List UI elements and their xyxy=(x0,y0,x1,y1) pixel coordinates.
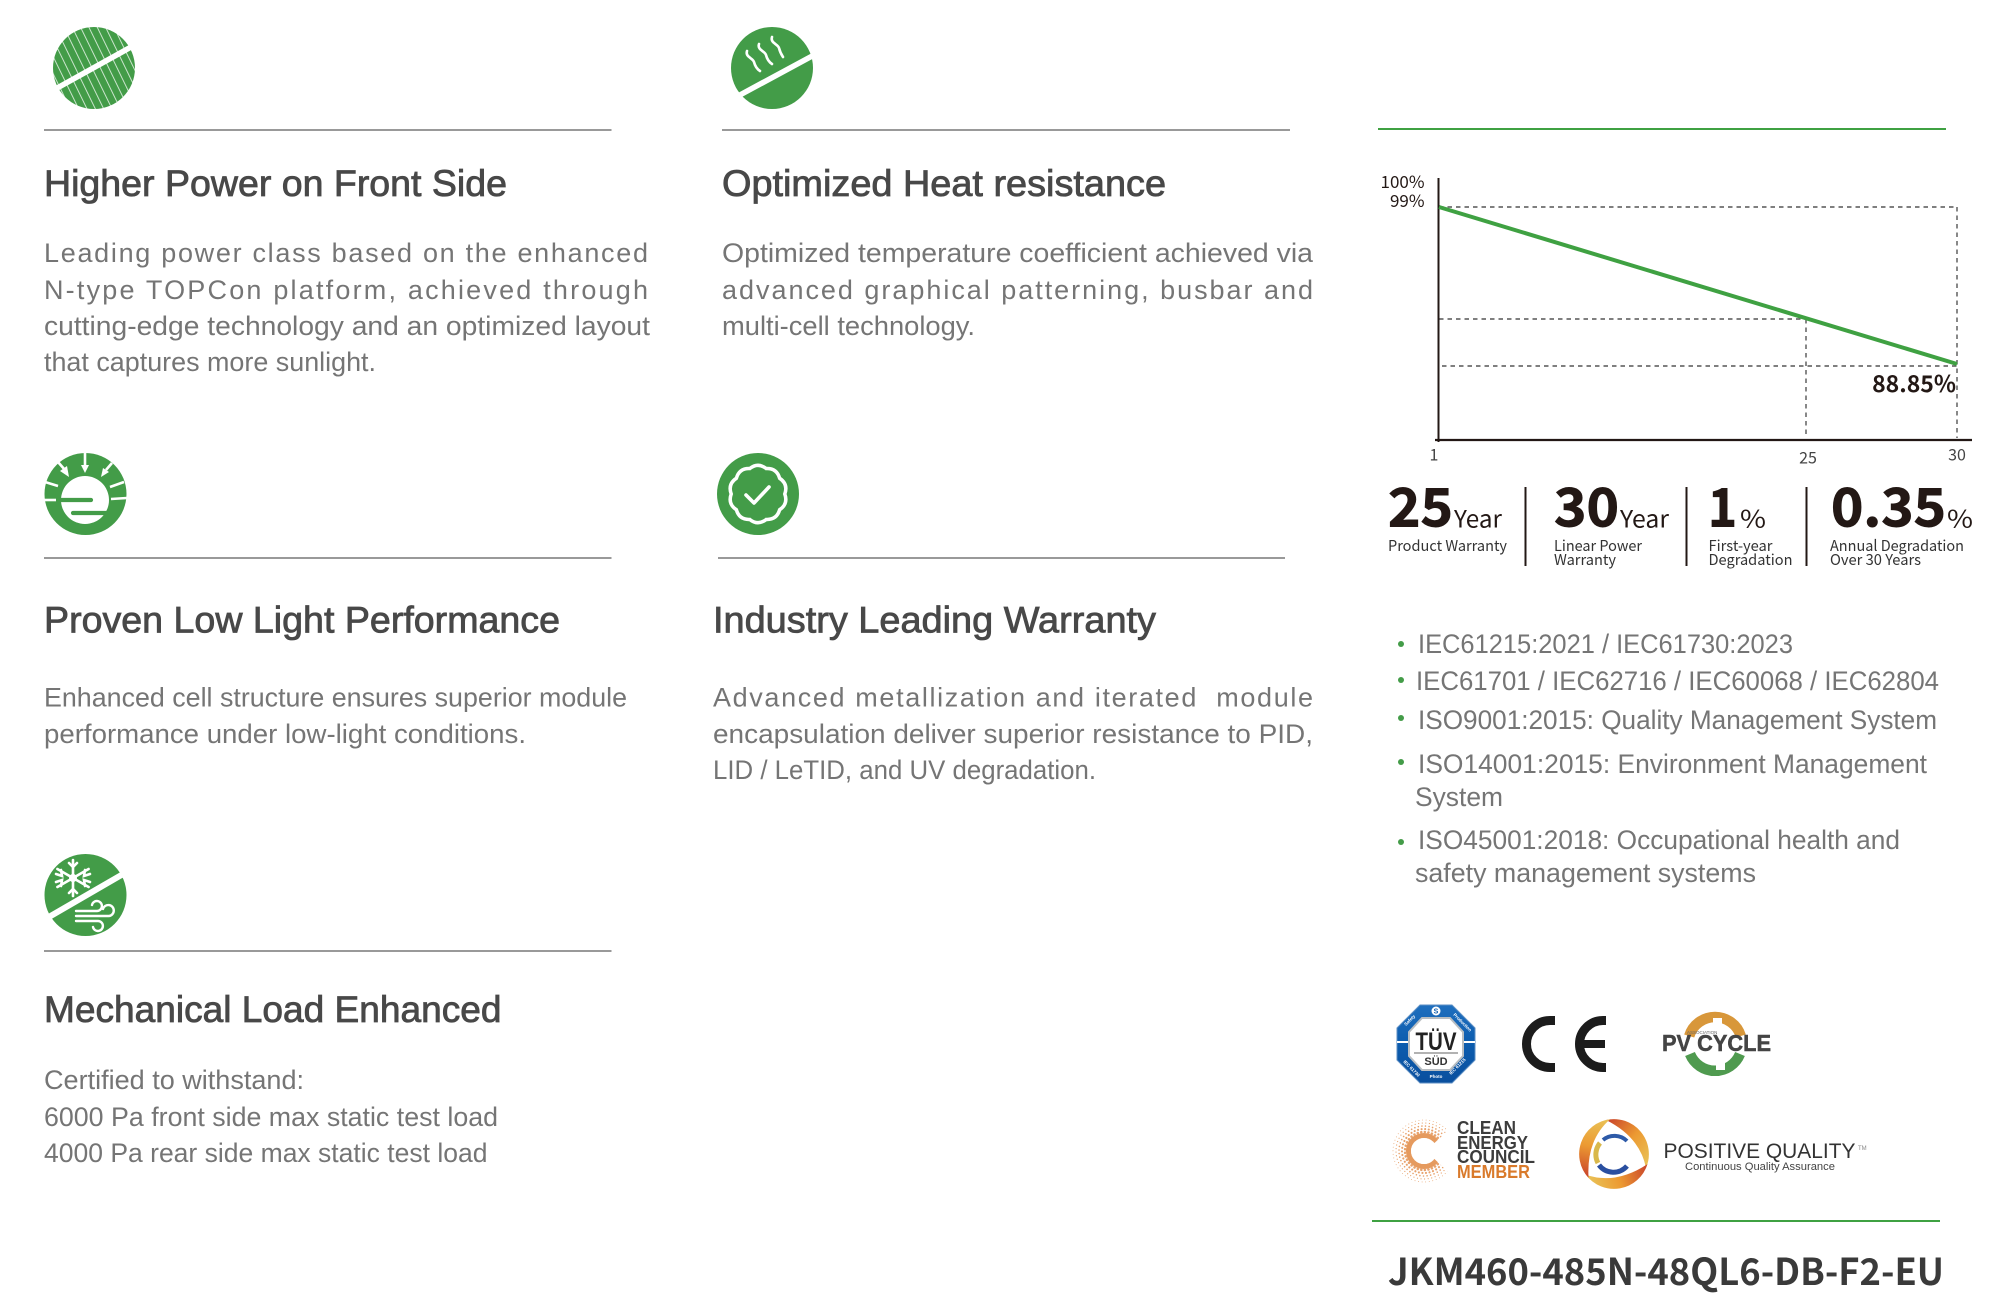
text: higher power description: that captures more sunlight. xyxy=(44,347,376,377)
heading: higher power: Higher Power on Front Side xyxy=(44,163,507,204)
model number: JKM460-485N-48QL6-DB-F2-EU xyxy=(1388,1242,1944,1296)
list: certifications: ISO9001:2015: Quality Management System xyxy=(1418,705,1937,735)
list: certifications: IEC61215:2021 / IEC61730:2023 xyxy=(1418,629,1793,659)
icon: dotted C xyxy=(1393,1118,1461,1184)
logo: Clean Energy Council: ENERGY xyxy=(1457,1132,1529,1153)
logo: TUV SUD: Safety xyxy=(1403,1013,1417,1027)
text: warranty description xyxy=(713,682,1313,785)
stat: annual degradation: % xyxy=(1947,500,1973,534)
text: warranty description: encapsulation deliver superior resistance to PID, xyxy=(713,719,1313,749)
stat: linear power warranty: Linear Power xyxy=(1554,535,1642,556)
list: certifications: IEC61701 / IEC62716 / IEC60068 / IEC62804 xyxy=(1416,666,1939,696)
logo: TUV SUD: IEC 61730 xyxy=(1402,1059,1421,1078)
stat: annual degradation: Over 30 Years xyxy=(1830,549,1921,570)
logo: TUV SUD: S xyxy=(1434,1008,1439,1016)
stat: annual degradation xyxy=(1830,466,1973,570)
heading: warranty: Industry Leading Warranty xyxy=(713,600,1156,640)
logo: Clean Energy Council: MEMBER xyxy=(1457,1161,1530,1182)
line: power output xyxy=(1439,207,1957,364)
text: warranty description: Advanced metallization and iterated module xyxy=(713,682,1313,712)
stat: linear power warranty xyxy=(1554,466,1670,570)
panel: mechanical load enhanced xyxy=(42,854,612,1168)
list: certifications: safety management systems xyxy=(1415,858,1756,888)
callout: 88.85%: 88.85% xyxy=(1872,365,1956,399)
axis labels: 30 xyxy=(1948,442,1966,466)
stat: first-year degradation: % xyxy=(1740,500,1766,534)
text: higher power description: cutting-edge technology and an optimized layout xyxy=(44,311,651,341)
icon: swirl xyxy=(1566,1117,1649,1202)
text: mechanical load description: 4000 Pa rear side max static test load xyxy=(44,1138,488,1168)
stat: product warranty: Product Warranty xyxy=(1388,535,1507,556)
list: certifications xyxy=(1398,629,1939,888)
logo: PV CYCLE: ASSOCIATION xyxy=(1687,1030,1717,1035)
text: heat resistance description: multi-cell technology. xyxy=(722,311,975,341)
panel: higher power on front side xyxy=(44,27,651,377)
stat: annual degradation: Annual Degradation xyxy=(1830,535,1964,556)
icon: low light sun with arrows xyxy=(44,453,127,535)
logo: Clean Energy Council xyxy=(1393,1117,1535,1184)
logo: Clean Energy Council: CLEAN xyxy=(1457,1117,1516,1138)
icon: heat waves xyxy=(727,27,827,109)
logo: Positive Quality xyxy=(1566,1117,1867,1202)
panel: optimized heat resistance xyxy=(722,27,1314,341)
axis labels: 1 xyxy=(1430,442,1438,466)
panel: industry leading warranty xyxy=(713,453,1313,785)
list: certifications: System xyxy=(1415,782,1503,812)
text: mechanical load description: Certified to withstand: xyxy=(44,1065,304,1095)
stat: first-year degradation: First-year xyxy=(1708,535,1773,556)
stat: product warranty: 25 xyxy=(1388,466,1453,542)
logo: Positive Quality: Continuous Quality Assurance xyxy=(1685,1161,1835,1173)
logo: CE mark xyxy=(1526,1020,1606,1068)
logo: TUV SUD: SÜD xyxy=(1424,1055,1448,1068)
axis labels: 99% xyxy=(1390,187,1424,212)
icon: warranty badge check xyxy=(717,453,799,535)
logo: Clean Energy Council: COUNCIL xyxy=(1457,1146,1535,1167)
chart: linear power degradation xyxy=(1381,168,1972,468)
logo: Positive Quality: POSITIVE QUALITY xyxy=(1664,1140,1856,1163)
text: mechanical load description: 6000 Pa front side max static test load xyxy=(44,1102,498,1132)
axis labels xyxy=(1381,168,1966,468)
stat: product warranty xyxy=(1388,466,1507,556)
stat: linear power warranty: Warranty xyxy=(1554,549,1616,570)
heading: mechanical load: Mechanical Load Enhanced xyxy=(44,989,502,1030)
axis labels: 100% xyxy=(1381,168,1424,193)
text: higher power description xyxy=(44,238,651,377)
stat: annual degradation: 0.35 xyxy=(1831,466,1946,542)
axis labels: 25 xyxy=(1799,444,1817,468)
logo: TUV SUD: TÜV xyxy=(1416,1027,1457,1056)
text: low light description: performance under low-light conditions. xyxy=(44,719,526,749)
logo: TUV SUD: IEC 61215 xyxy=(1448,1057,1467,1076)
stat: linear power warranty: 30 xyxy=(1554,466,1619,542)
stat: linear power warranty: Year xyxy=(1619,500,1670,534)
text: higher power description: Leading power class based on the enhanced xyxy=(44,238,648,268)
stat: first-year degradation xyxy=(1708,466,1792,570)
icon: solar cell hatch xyxy=(50,27,140,109)
text: higher power description: N-type TOPCon platform, achieved through xyxy=(44,275,648,305)
logo: TUV SUD: Production xyxy=(1452,1012,1473,1033)
text: warranty description: LID / LeTID, and UV degradation. xyxy=(713,755,1096,785)
logo: PV CYCLE xyxy=(1662,1017,1771,1071)
text: heat resistance description: Optimized temperature coefficient achieved via xyxy=(722,238,1314,268)
stat: first-year degradation: 1 xyxy=(1708,466,1737,542)
list: certifications: ISO45001:2018: Occupational health and xyxy=(1418,825,1900,855)
logo: Positive Quality: TM xyxy=(1858,1146,1867,1152)
text: heat resistance description: advanced graphical patterning, busbar and xyxy=(722,275,1313,305)
panel: proven low light performance xyxy=(44,453,627,749)
logo: TUV SUD xyxy=(1397,1005,1475,1083)
text: low light description xyxy=(44,682,627,749)
logo: TUV SUD: Photo xyxy=(1430,1074,1443,1079)
icon: snow and wind xyxy=(42,854,130,936)
heading: heat resistance: Optimized Heat resistance xyxy=(722,163,1166,204)
stat: product warranty: Year xyxy=(1453,500,1503,534)
text: low light description: Enhanced cell structure ensures superior module xyxy=(44,682,627,712)
heading: low light: Proven Low Light Performance xyxy=(44,600,560,640)
text: mechanical load description xyxy=(44,1065,498,1168)
stat: first-year degradation: Degradation xyxy=(1708,549,1792,570)
stats row xyxy=(1388,466,1973,570)
logo: PV CYCLE: PV CYCLE xyxy=(1662,1030,1771,1056)
text: heat resistance description xyxy=(722,238,1314,341)
list: certifications: ISO14001:2015: Environment Management xyxy=(1418,749,1927,779)
